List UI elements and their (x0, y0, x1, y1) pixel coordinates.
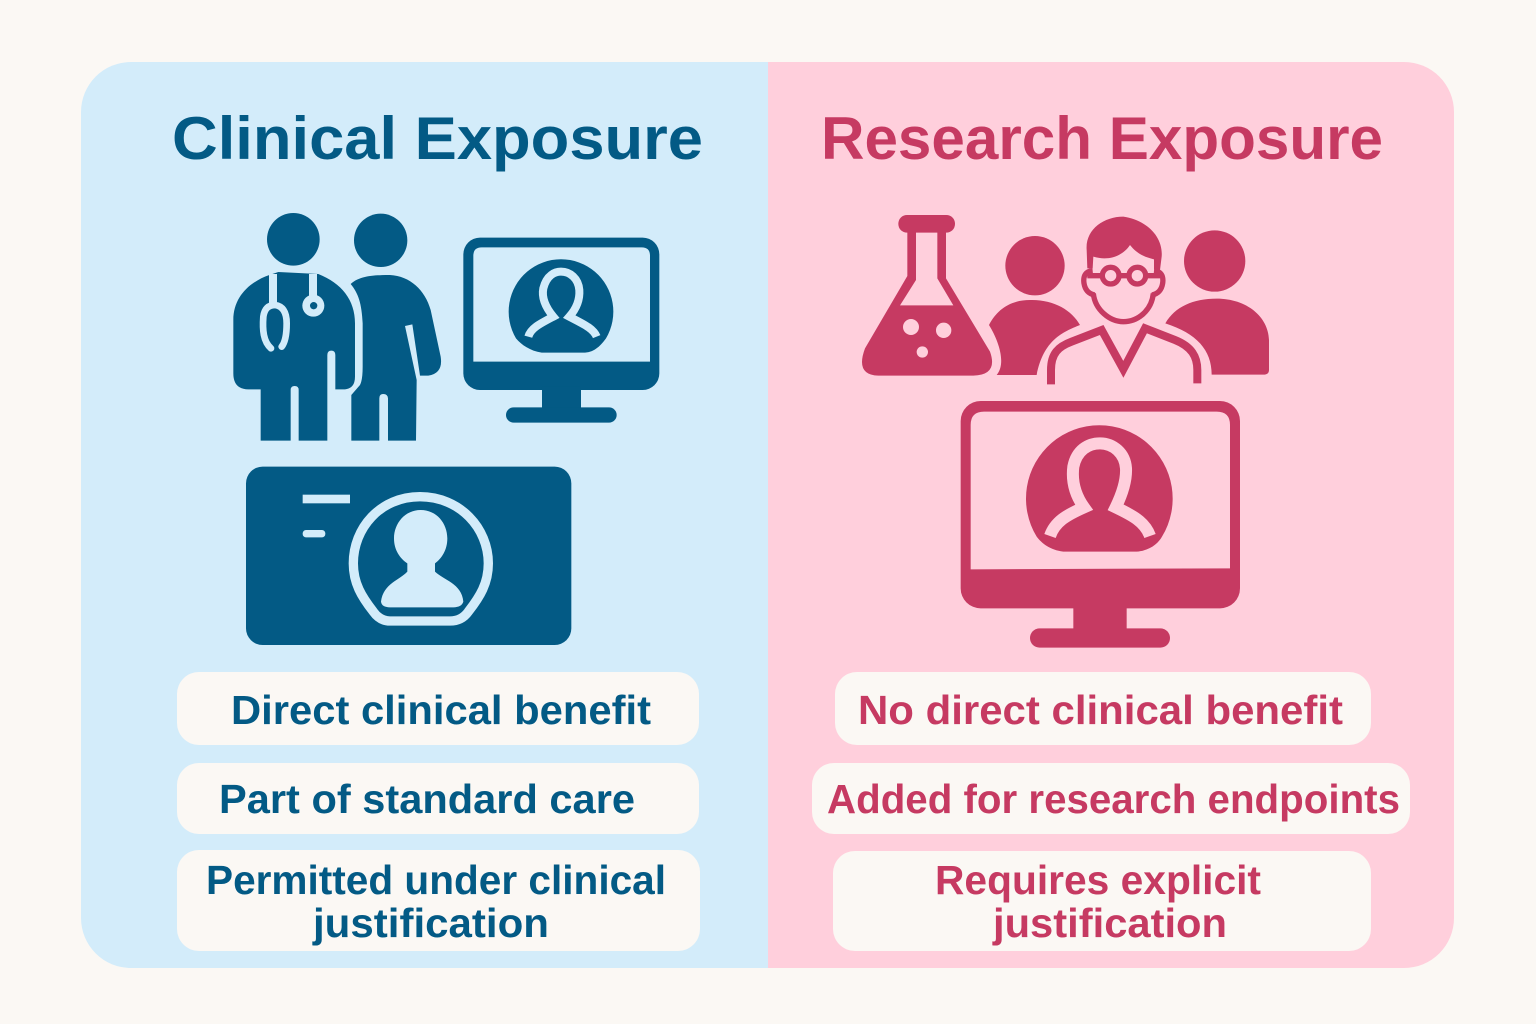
panel: research exposure (768, 62, 1454, 968)
callout: direct clinical benefit: Direct clinical benefit (231, 687, 651, 733)
icon: research participants and investigator (989, 217, 1269, 384)
icon: monitor with patient portrait (463, 238, 659, 423)
callout: permitted under clinical justification: Permitted under clinical (206, 857, 666, 903)
callout: part of standard care (177, 763, 699, 834)
callout: no direct clinical benefit: No direct clinical benefit (858, 687, 1343, 733)
heading: clinical exposure: Clinical Exposure (172, 105, 703, 172)
heading: research exposure: Research Exposure (821, 105, 1383, 172)
callout: requires explicit justification: justification (992, 900, 1227, 946)
callout: direct clinical benefit (177, 672, 699, 745)
callout: added for research endpoints (812, 763, 1410, 834)
callout: no direct clinical benefit (835, 672, 1371, 745)
callout: permitted under clinical justification (177, 850, 700, 951)
panel: clinical exposure (81, 62, 768, 968)
callout: permitted under clinical justification: justification (312, 900, 549, 946)
callout: part of standard care: Part of standard care (219, 776, 635, 822)
callout: requires explicit justification (833, 851, 1371, 951)
icon: patient id card (246, 467, 571, 645)
icon: monitor with participant portrait (961, 401, 1240, 648)
callout: added for research endpoints: Added for research endpoints (827, 776, 1400, 822)
icon: doctor and patient (233, 213, 441, 441)
icon: laboratory flask (862, 215, 992, 376)
callout: requires explicit justification: Requires explicit (935, 857, 1261, 903)
